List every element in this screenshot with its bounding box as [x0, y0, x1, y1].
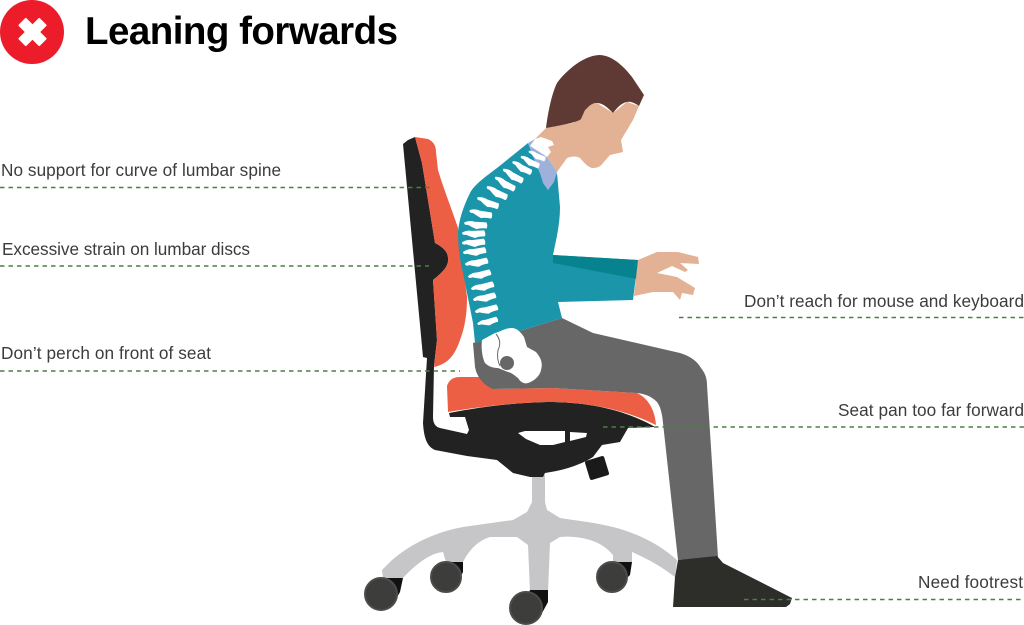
- seat cushion: [447, 377, 656, 425]
- office chair: [365, 137, 677, 624]
- backrest shell: [403, 137, 655, 477]
- label: reach: Don’t reach for mouse and keyboard: [744, 291, 1024, 311]
- chair base: [382, 475, 677, 592]
- neck and face: [535, 102, 639, 172]
- pelvis bone: [482, 328, 542, 383]
- label: lumbar support: No support for curve of lumbar spine: [1, 160, 281, 180]
- height lever knob: [585, 456, 609, 480]
- casters: [365, 562, 627, 624]
- seat slots: [518, 431, 587, 445]
- hair: [546, 55, 644, 128]
- shoe: [673, 556, 792, 607]
- label: footrest: Need footrest: [918, 572, 1023, 592]
- label: seat pan: Seat pan too far forward: [838, 400, 1024, 420]
- seated man: [458, 55, 792, 607]
- label: lumbar discs: Excessive strain on lumbar discs: [2, 239, 250, 259]
- label: perch: Don’t perch on front of seat: [1, 343, 211, 363]
- title: Leaning forwards: [85, 10, 398, 53]
- icon: red cross badge: [0, 0, 64, 64]
- trousers: [473, 318, 718, 560]
- spine: [462, 137, 554, 328]
- sleeve shadow: [553, 255, 638, 279]
- shirt collar: [528, 139, 557, 190]
- sweater: [458, 143, 638, 343]
- caster forks: [376, 562, 632, 615]
- backrest cushion: [415, 137, 467, 367]
- hand: [634, 252, 699, 300]
